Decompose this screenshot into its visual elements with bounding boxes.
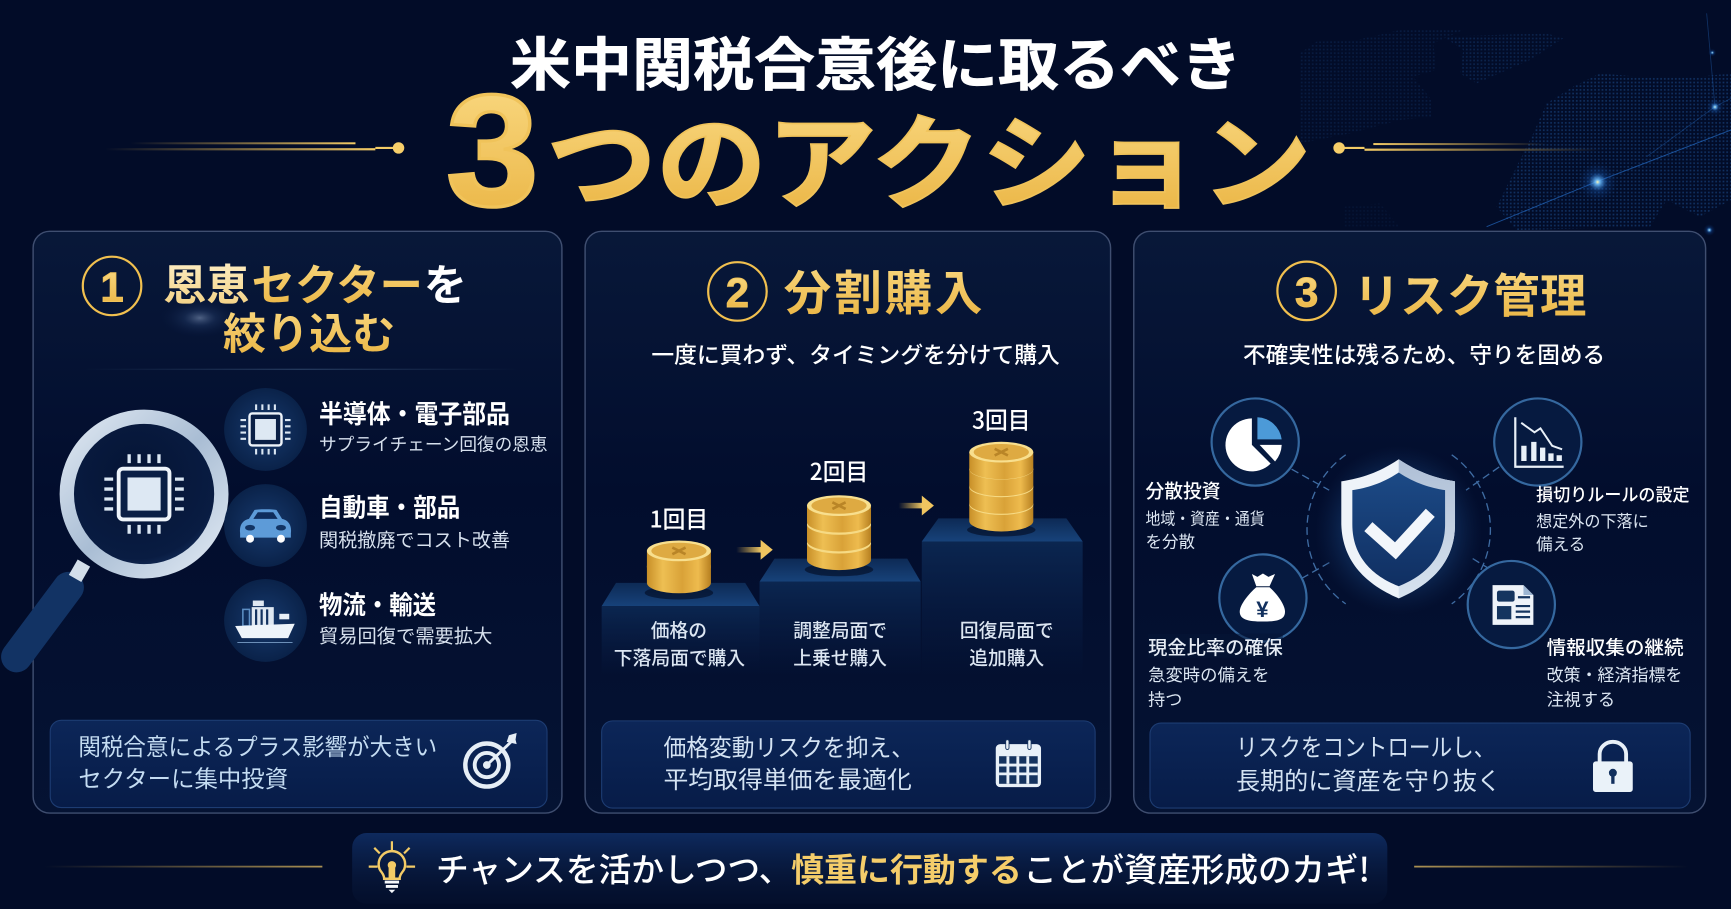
item: stop loss: 損切りルールの設定 bbox=[1536, 482, 1690, 507]
step 2: 2回目 bbox=[810, 453, 868, 487]
step 1: 1回目 bbox=[650, 501, 708, 535]
step 3: 3回目 bbox=[972, 401, 1031, 435]
panel 2: staged purchase bbox=[585, 231, 1111, 813]
number badge 1: 1 bbox=[100, 263, 124, 310]
callout 1: 関税合意によるプラス影響が大きい bbox=[78, 728, 437, 762]
dashed connectors and ring bbox=[1292, 455, 1501, 604]
footer banner: ことが資産形成のカギ! bbox=[1023, 844, 1370, 892]
heading 1 bbox=[163, 251, 467, 362]
item: diversification bbox=[1145, 398, 1299, 553]
icon: light bulb bbox=[369, 841, 415, 893]
heading 1: セクター bbox=[252, 251, 423, 313]
step 1: 価格の bbox=[651, 616, 707, 643]
heading 2: 分割購入 bbox=[784, 255, 983, 324]
heading 1: 絞り込む bbox=[223, 300, 395, 362]
icon: padlock bbox=[1593, 742, 1633, 792]
sector: semiconductors: サプライチェーン回復の恩恵 bbox=[319, 431, 548, 456]
title line 1: 米中関税合意後に取るべき bbox=[510, 18, 1242, 102]
title number 3: 3 bbox=[446, 61, 539, 239]
sector: semiconductors bbox=[224, 388, 548, 471]
callout 1: セクターに集中投資 bbox=[78, 760, 288, 794]
number badge 3 bbox=[1277, 262, 1336, 320]
panel 1: beneficiary sectors bbox=[17, 231, 562, 813]
ornament: left gold lines bbox=[105, 142, 404, 154]
arrow 2 bbox=[899, 496, 934, 516]
sector: automobiles: 関税撤廃でコスト改善 bbox=[319, 525, 510, 552]
item: diversification: 分散投資 bbox=[1145, 476, 1221, 503]
item: cash ratio: 持つ bbox=[1148, 685, 1182, 710]
footer banner: チャンスを活かしつつ、 bbox=[436, 844, 792, 892]
icon: calendar bbox=[996, 740, 1041, 787]
item: stop loss: 想定外の下落に bbox=[1536, 508, 1649, 532]
world map background bbox=[1300, 13, 1731, 236]
sector: logistics: 物流・輸送 bbox=[319, 586, 436, 622]
step 3 bbox=[922, 401, 1083, 674]
item: diversification: 地域・資産・通貨 bbox=[1145, 505, 1265, 529]
heading 3: リスク管理 bbox=[1353, 259, 1586, 326]
sector: logistics bbox=[224, 579, 492, 662]
title line 2: つのアクション bbox=[546, 81, 1311, 230]
ornament: right gold lines bbox=[1333, 142, 1600, 154]
step 3: 追加購入 bbox=[969, 644, 1045, 671]
callout 2 bbox=[602, 721, 1095, 808]
item: cash ratio: 急変時の備えを bbox=[1148, 661, 1270, 686]
step 1: 下落局面で購入 bbox=[614, 644, 745, 671]
footer: left gold line bbox=[44, 866, 322, 867]
item: information gathering bbox=[1468, 561, 1684, 710]
number badge 1 bbox=[83, 257, 141, 315]
subtitle 3: 不確実性は残るため、守りを固める bbox=[1243, 337, 1605, 370]
sector: automobiles: 自動車・部品 bbox=[319, 489, 460, 525]
footer banner bbox=[352, 833, 1387, 904]
number badge 2 bbox=[708, 262, 767, 321]
footer banner: 慎重に行動する bbox=[791, 844, 1022, 892]
callout 3: 長期的に資産を守り抜く bbox=[1236, 761, 1501, 796]
footer: right gold line bbox=[1414, 866, 1689, 867]
item: diversification: を分散 bbox=[1145, 529, 1195, 553]
callout 3 bbox=[1150, 723, 1690, 808]
callout 2: 平均取得単価を最適化 bbox=[663, 760, 912, 795]
heading 1: を bbox=[424, 251, 467, 313]
item: stop loss: 備える bbox=[1536, 531, 1585, 555]
icon: target bbox=[465, 733, 517, 787]
item: cash ratio bbox=[1148, 554, 1307, 710]
subtitle 2: 一度に買わず、タイミングを分けて購入 bbox=[651, 337, 1060, 370]
item: information gathering: 改策・経済指標を bbox=[1547, 661, 1682, 686]
item: cash ratio: 現金比率の確保 bbox=[1148, 633, 1283, 660]
item: cash ratio: ¥ bbox=[1256, 597, 1269, 622]
number badge 2: 2 bbox=[726, 269, 749, 316]
step 2: 上乗せ購入 bbox=[793, 644, 887, 671]
sector: logistics: 貿易回復で需要拡大 bbox=[319, 622, 492, 649]
icon: magnifying glass bbox=[17, 417, 221, 657]
heading 1: 恩恵 bbox=[163, 251, 249, 313]
sector: semiconductors: 半導体・電子部品 bbox=[319, 395, 510, 431]
callout 1 bbox=[50, 720, 547, 808]
icon: shield bbox=[1315, 446, 1483, 614]
step 1 bbox=[602, 501, 760, 675]
step 3: 回復局面で bbox=[960, 616, 1054, 643]
title bbox=[446, 18, 1311, 239]
item: information gathering: 注視する bbox=[1547, 685, 1615, 710]
panel 3: risk management bbox=[1134, 231, 1706, 813]
arrow 1 bbox=[736, 540, 773, 560]
callout 2: 価格変動リスクを抑え、 bbox=[663, 728, 914, 763]
step 2: 調整局面で bbox=[793, 616, 887, 643]
number badge 3: 3 bbox=[1295, 268, 1318, 315]
item: information gathering: 情報収集の継続 bbox=[1547, 633, 1684, 660]
step 2 bbox=[760, 453, 921, 675]
item: stop loss bbox=[1494, 398, 1690, 555]
sector: automobiles bbox=[224, 484, 510, 567]
callout 3: リスクをコントロールし、 bbox=[1236, 728, 1495, 763]
